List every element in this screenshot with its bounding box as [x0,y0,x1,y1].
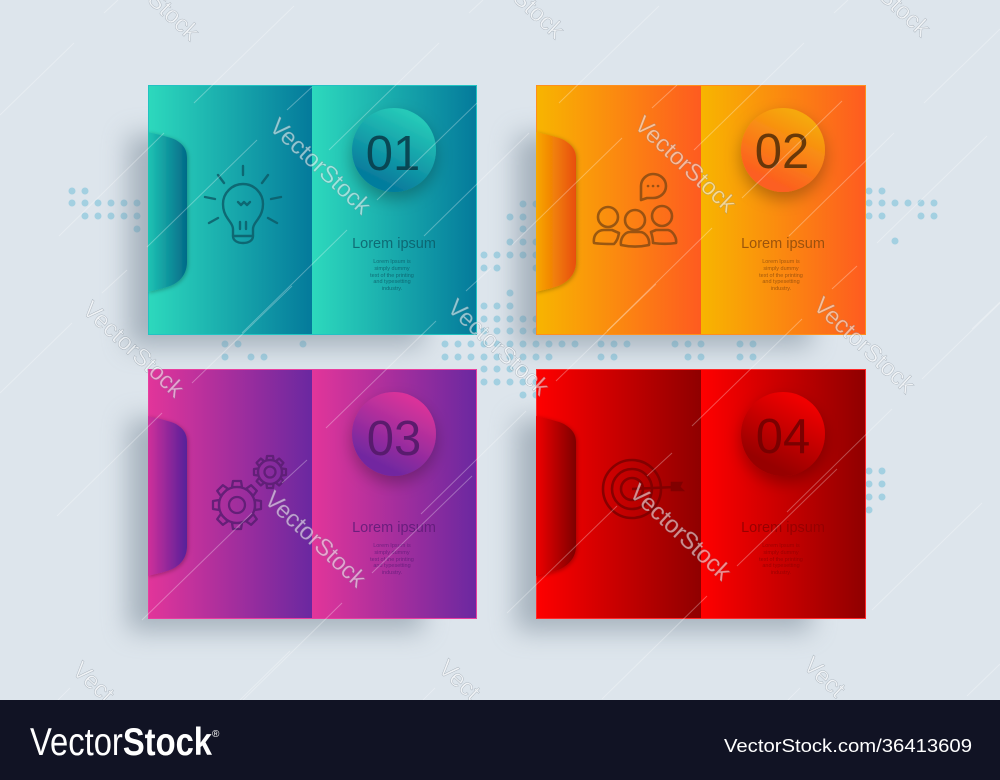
card 2 left panel [536,85,701,335]
footer image id: VectorStock.com/36413609 [724,735,972,756]
badge circle 03 [352,392,436,476]
body text: simply dummy [763,266,799,272]
body text: and typesetting [373,279,411,285]
icon: target with arrow [603,460,682,518]
card 2: orange, team [536,85,866,335]
card 1: teal, idea [148,85,477,335]
VectorStock watermarks: VectorStock [629,111,742,219]
body text [759,259,803,292]
world map dots [72,191,934,510]
card drop shadows [128,135,811,631]
VectorStock watermarks: VectorStock [624,479,737,587]
badge number 01: 01 [366,127,420,181]
body text: industry. [771,286,792,292]
badge number 03: 03 [367,412,421,466]
card 3 pocket tab [148,416,187,576]
VectorStock watermarks: VectorStock [808,292,921,400]
body text [759,543,803,576]
icon: gears [213,456,286,529]
body text: Lorem Ipsum is [762,259,800,265]
card 4 border [536,370,866,618]
body text: industry. [771,570,792,576]
body text: and typesetting [762,563,800,569]
body text: industry. [382,286,403,292]
card 3: purple, gears [148,369,477,619]
icon: team with speech bubble [594,174,676,246]
card 4 pocket tab [536,416,576,576]
heading: Lorem ipsum: Lorem ipsum [352,520,436,536]
icon: light bulb [205,166,281,243]
body text: simply dummy [763,550,799,556]
VectorStock watermarks: VectorStock [259,486,372,594]
body text: simply dummy [374,266,410,272]
body text: simply dummy [374,550,410,556]
badge circle 01 [352,108,436,192]
badge number 04: 04 [756,410,810,464]
card 4 right panel [701,369,866,619]
card 4: red, target [536,369,866,619]
body text: industry. [382,570,403,576]
card 3 right panel [312,369,477,619]
VectorStock watermarks: VectorStock [442,294,555,402]
heading: Lorem ipsum: Lorem ipsum [352,236,436,252]
badge number 02: 02 [755,125,809,179]
VectorStock watermarks: VectorStock [77,296,190,404]
heading: Lorem ipsum: Lorem ipsum [741,236,825,252]
card 1 left panel [148,85,312,335]
body text: and typesetting [762,279,800,285]
body text: text of the printing [759,273,803,279]
badge circle 02 [741,108,825,192]
body text: Lorem Ipsum is [373,259,411,265]
heading: Lorem ipsum: Lorem ipsum [741,520,825,536]
card 3 border [148,370,476,618]
body text: Lorem Ipsum is [373,543,411,549]
card 2 right panel [701,85,866,335]
VectorStock watermarks [67,0,936,708]
registered mark: ® [212,729,220,740]
card 1 border [148,86,476,334]
body text: and typesetting [373,563,411,569]
VectorStock watermarks: Vect [67,657,120,708]
footer bar [0,700,1000,780]
body text [370,259,414,292]
card 4 left panel [536,369,701,619]
card 1 pocket tab [148,132,187,292]
body text: text of the printing [759,557,803,563]
VectorStock watermarks: VectorStock [264,113,377,221]
VectorStock watermarks: Vect [433,655,486,706]
body text: Lorem Ipsum is [762,543,800,549]
VectorStock watermarks: Vect [798,652,851,703]
card 1 right panel [312,85,477,335]
body text: text of the printing [370,557,414,563]
body text [370,543,414,576]
footer logo: VectorStock [30,721,212,764]
card 2 border [536,86,866,334]
body text: text of the printing [370,273,414,279]
badge circle 04 [741,392,825,476]
card 3 left panel [148,369,312,619]
card 2 pocket tab [536,132,576,292]
